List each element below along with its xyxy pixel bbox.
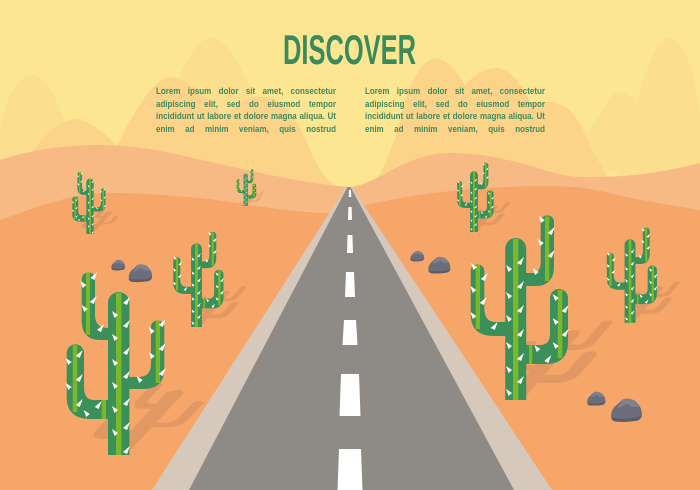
mountains: far range	[0, 37, 700, 200]
text block right: enim ad minim veniam, quis nostrud	[365, 124, 545, 135]
cactus: large left	[66, 272, 223, 455]
rock: right large	[428, 257, 450, 274]
cactus: tiny centre left	[237, 169, 268, 206]
mountains: near range	[20, 58, 610, 190]
text block left: enim ad minim veniam, quis nostrud	[156, 124, 336, 135]
back dune	[0, 145, 700, 490]
rock: right small	[410, 251, 424, 261]
text block right: Lorem ipsum dolor sit amet, consectetur	[365, 86, 545, 97]
text block left: Lorem ipsum dolor sit amet, consectetur	[156, 86, 336, 97]
rock: lower large	[611, 399, 642, 422]
text block left: adipiscing elit, sed do eiusmod tempor	[156, 99, 336, 110]
cactus: large right	[470, 215, 626, 400]
rock: left small	[111, 260, 125, 270]
cactus: medium left	[173, 232, 253, 327]
cactus: far right	[457, 163, 515, 232]
text block right	[365, 86, 545, 135]
text block left	[156, 86, 336, 135]
rock: left large	[129, 264, 152, 282]
front dune	[0, 186, 700, 490]
text block left: incididunt ut labore et dolore magna aliqua. Ut	[156, 111, 336, 122]
text block right: adipiscing elit, sed do eiusmod tempor	[365, 99, 545, 110]
cactus: far left	[72, 172, 125, 234]
road shoulder	[152, 187, 552, 490]
text block right: incididunt ut labore et dolore magna aliqua. Ut	[365, 111, 545, 122]
title: DISCOVER	[283, 26, 416, 73]
rock: lower small	[587, 392, 605, 406]
road	[189, 187, 514, 490]
road dashes	[338, 190, 362, 490]
cactus: medium right	[607, 228, 687, 323]
